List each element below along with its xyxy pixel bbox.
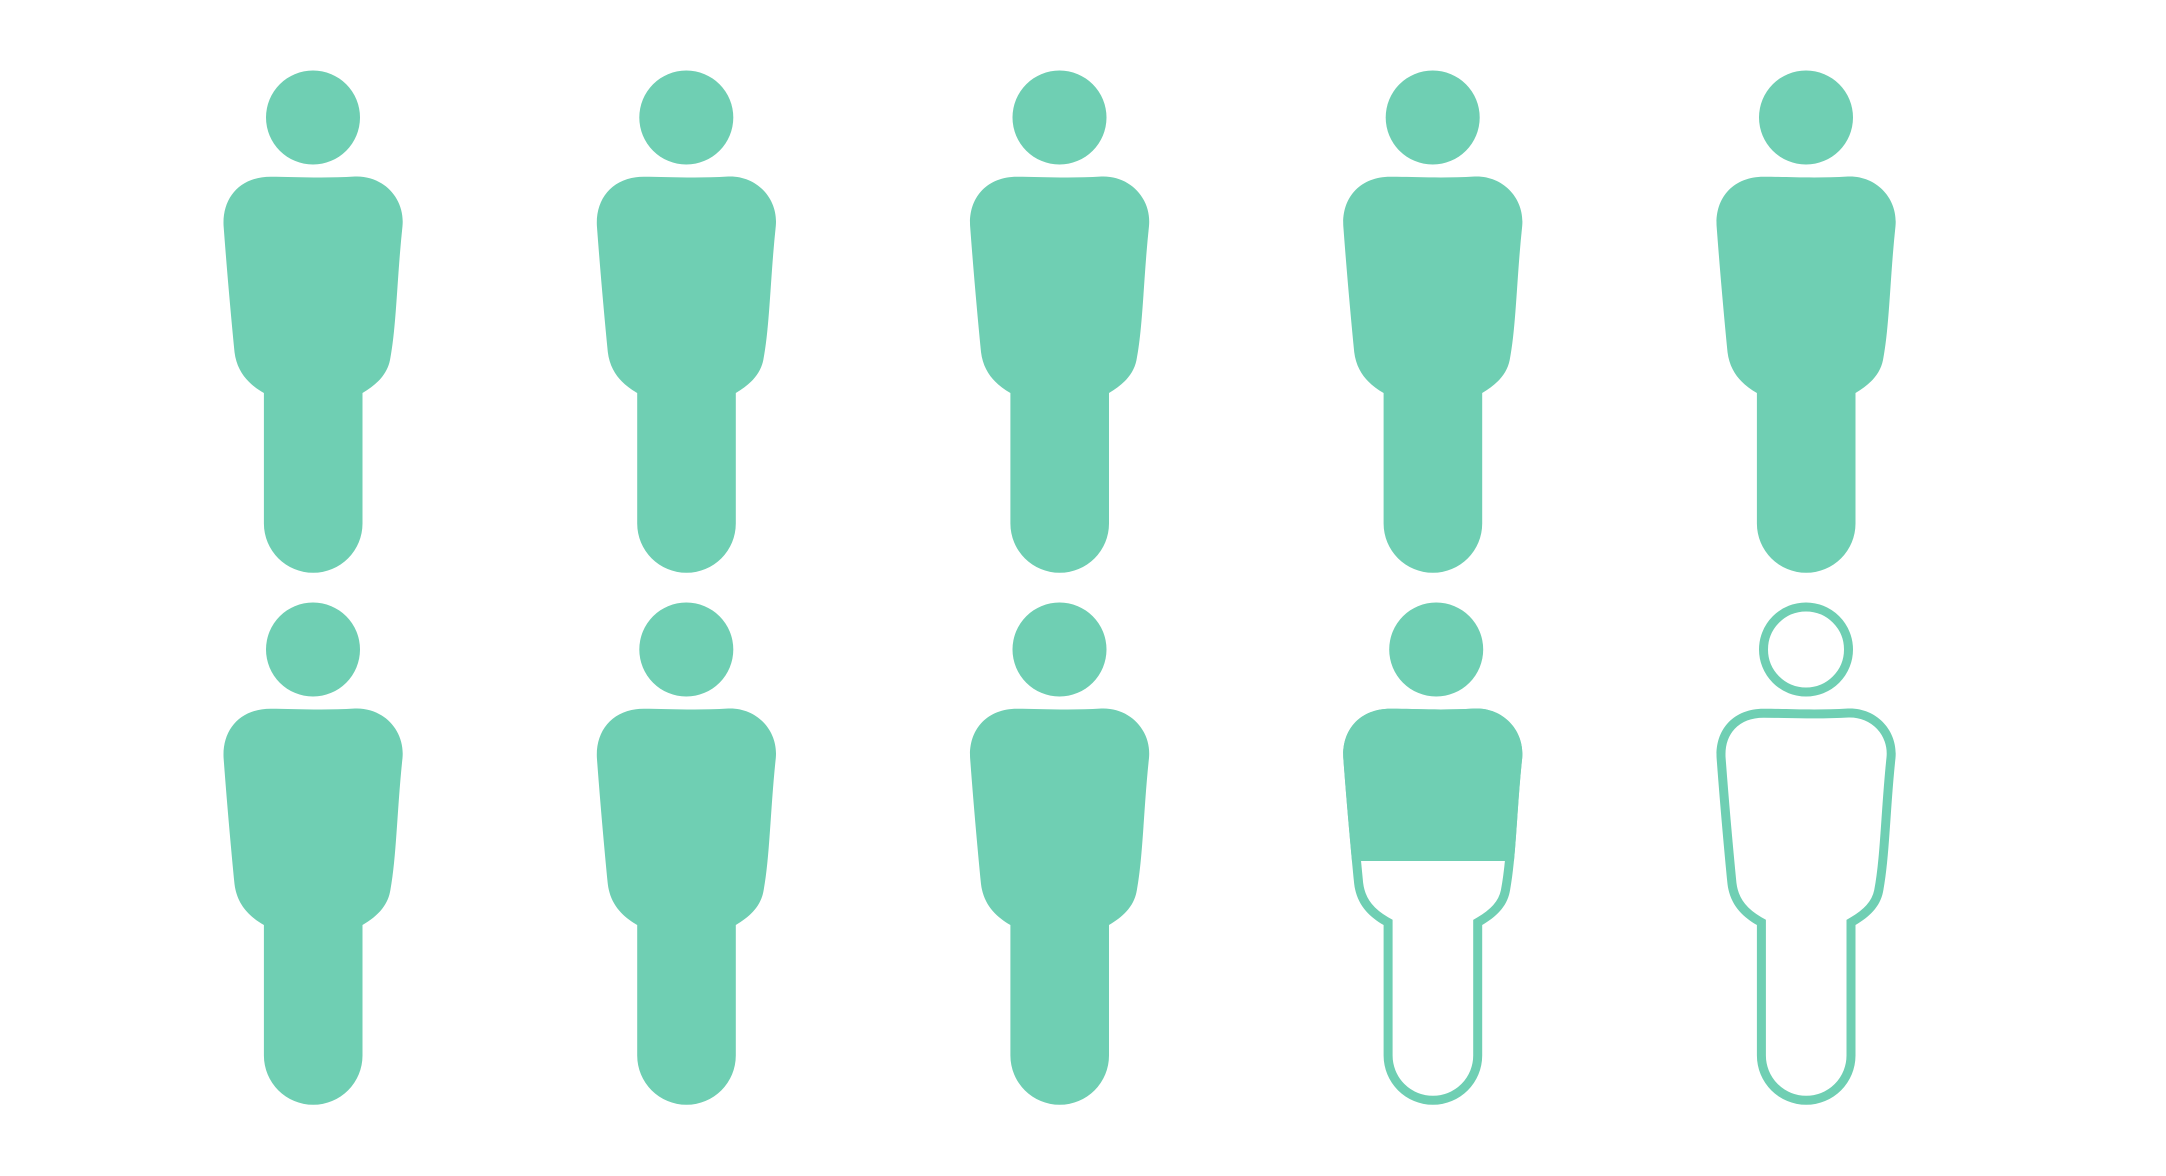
row 2, person 2: filled <box>597 602 776 1105</box>
row 2, person 5: outline only <box>1717 607 1896 1105</box>
row 2, person 3: filled <box>970 602 1149 1105</box>
pictogram chart: 8.5 of 10 people filled <box>224 70 1896 1105</box>
row 1, person 4: filled <box>1343 70 1522 573</box>
row 1, person 5: filled <box>1717 70 1896 573</box>
row 1, person 1: filled <box>224 70 403 573</box>
row 1, person 2: filled <box>597 70 776 573</box>
row 2, person 1: filled <box>224 602 403 1105</box>
row 1, person 3: filled <box>970 70 1149 573</box>
row 2, person 4: partly filled <box>1343 602 1522 1105</box>
